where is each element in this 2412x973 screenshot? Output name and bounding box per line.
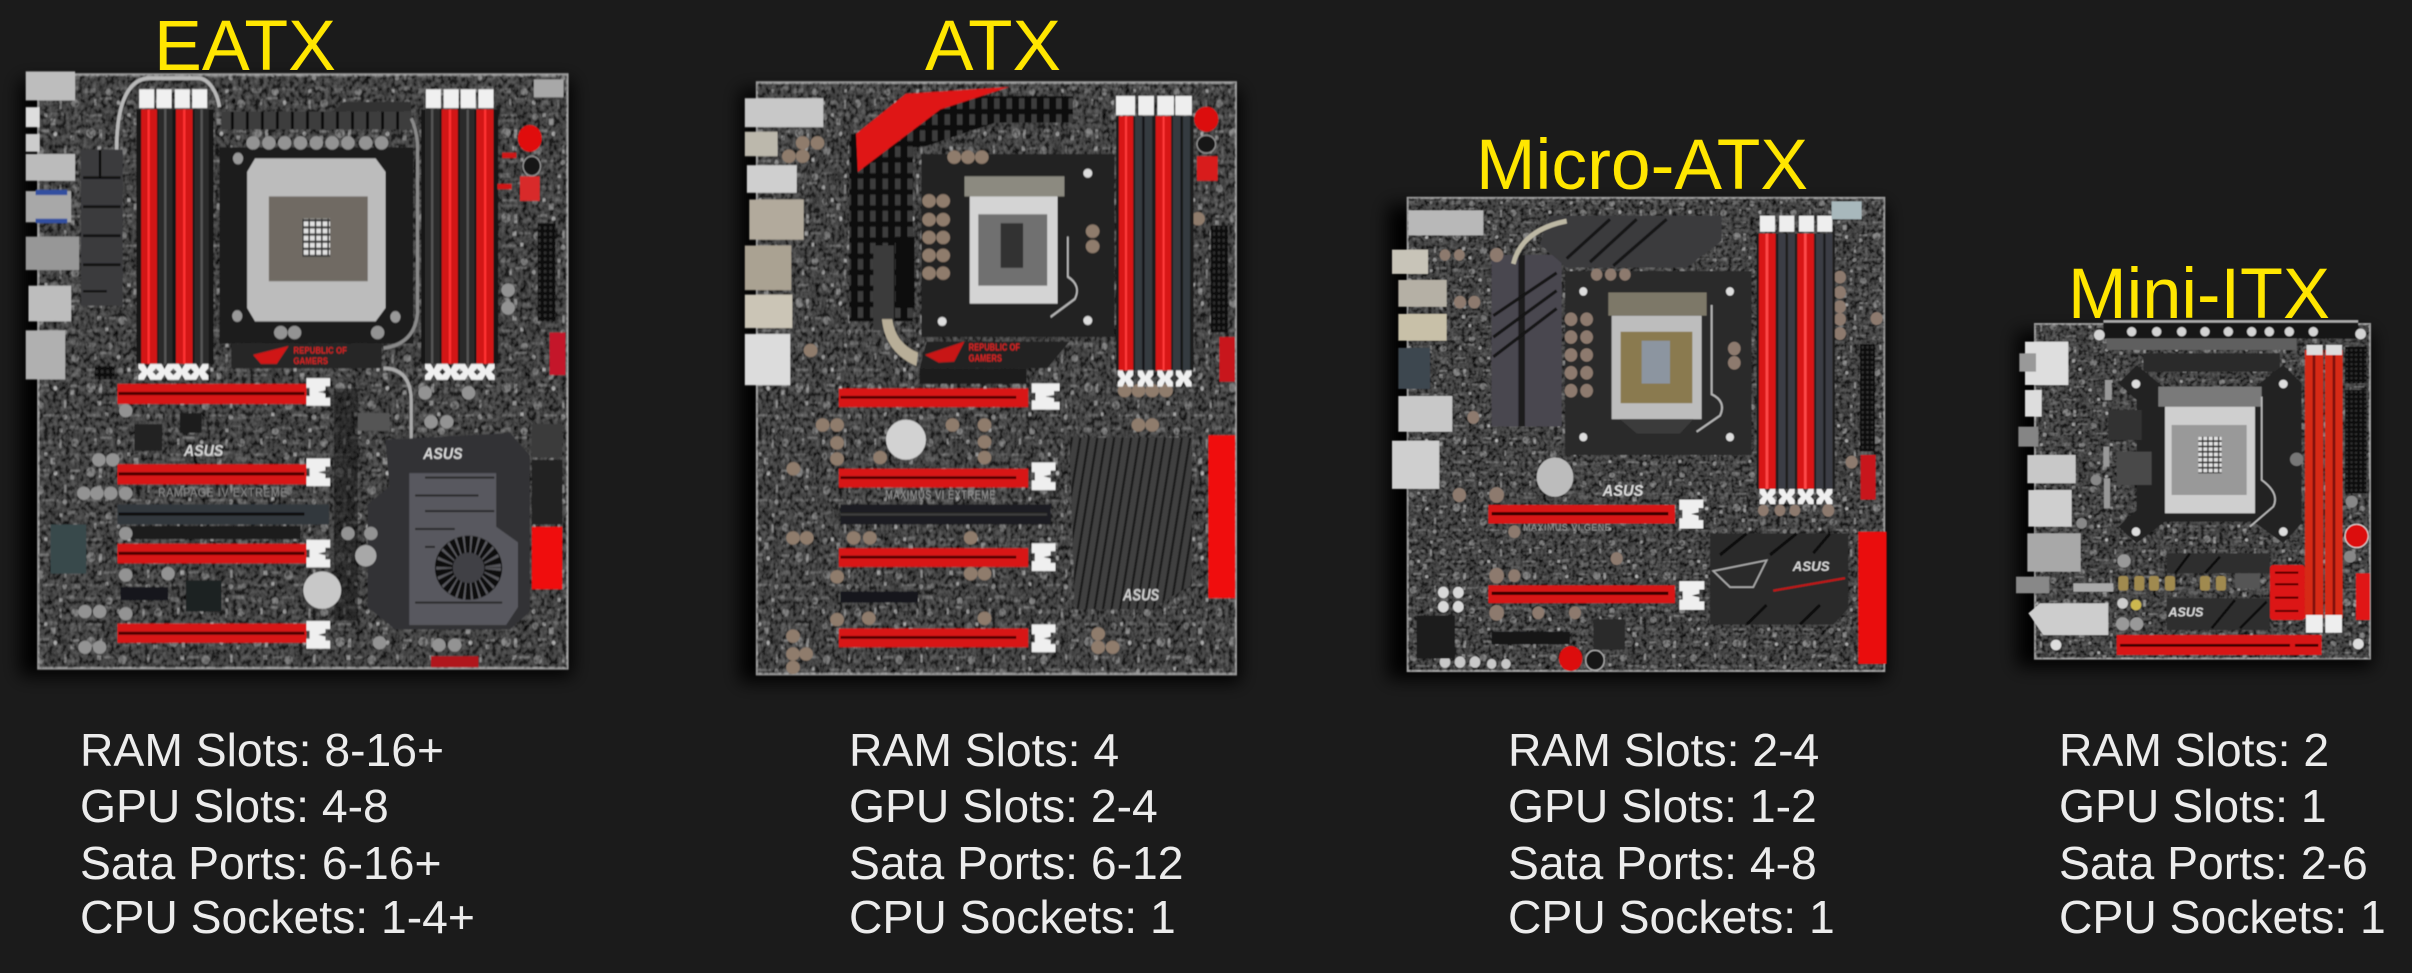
specs: Micro-ATX: RAM Slots: 2-4 (1508, 724, 1819, 776)
board name: MAXIMUS VI EXTREME (885, 490, 996, 502)
title: EATX: EATX (154, 7, 336, 86)
ROG plate: REPUBLIC OF (293, 345, 347, 356)
ROG chipset heatsink: ASUS (1792, 558, 1830, 574)
board logos: ASUS (183, 442, 223, 460)
capacitors (2076, 453, 2358, 631)
board logos (158, 442, 288, 500)
ROG plate (231, 344, 382, 368)
VRM heatsink (81, 150, 123, 306)
specs: Micro-ATX: Sata Ports: 4-8 (1508, 837, 1817, 889)
ROG chipset heatsink (1710, 534, 1848, 625)
specs: Mini-ITX (2059, 724, 2386, 943)
chipset heatsink (2167, 553, 2270, 630)
specs: ATX: CPU Sockets: 1 (849, 891, 1176, 943)
SATA ports (2270, 565, 2305, 620)
VRM heatsinks (1492, 216, 1722, 426)
specs: ATX: RAM Slots: 4 (849, 724, 1119, 776)
motherboard: Mini-ITX (2016, 320, 2370, 659)
power connector (1211, 225, 1235, 382)
RAM slots (1757, 201, 1862, 504)
chipset fan heatsink: ASUS (422, 445, 463, 463)
shadow: ATX board (740, 90, 1240, 682)
top heatsink (221, 102, 411, 129)
power connector (538, 223, 556, 321)
specs: Mini-ITX: Sata Ports: 2-6 (2059, 837, 2368, 889)
specs: Mini-ITX: GPU Slots: 1 (2059, 780, 2327, 832)
title: ATX: ATX (925, 7, 1061, 86)
capacitors and battery (1438, 248, 1883, 669)
onboard button (2344, 524, 2370, 620)
specs: EATX: RAM Slots: 8-16+ (80, 724, 444, 776)
title: Mini-ITX: Mini-ITX (2068, 255, 2330, 334)
CPU socket (1565, 271, 1752, 455)
ROG plate (920, 341, 1070, 384)
motherboard: ATX (745, 83, 1236, 674)
heat pipe (117, 78, 219, 150)
CPU socket (2118, 365, 2302, 543)
PCIe slot (2051, 635, 2364, 655)
chips (51, 366, 389, 620)
SATA ports (1208, 435, 1235, 598)
rear I/O ports (1392, 210, 1483, 489)
top heatsink (2094, 320, 2366, 372)
specs: Micro-ATX (1508, 724, 1835, 943)
ROG plate: GAMERS (293, 355, 328, 366)
SATA ports (431, 333, 565, 667)
shadow: Mini-ITX board (2017, 332, 2372, 667)
specs: ATX: Sata Ports: 6-12 (849, 837, 1184, 889)
motherboard: EATX (26, 71, 567, 668)
specs: ATX: GPU Slots: 2-4 (849, 780, 1158, 832)
onboard buttons (1559, 619, 1625, 671)
SATA ports (1858, 532, 1887, 664)
specs: EATX: Sata Ports: 6-16+ (80, 837, 442, 889)
specs: Micro-ATX: GPU Slots: 1-2 (1508, 780, 1817, 832)
ROG plate: REPUBLIC OF (969, 341, 1021, 353)
RAM slots (1116, 96, 1194, 387)
PCIe slots (1417, 500, 1704, 659)
onboard buttons (497, 79, 563, 201)
specs: Mini-ITX: CPU Sockets: 1 (2059, 891, 2386, 943)
RAM slots right (421, 89, 498, 380)
CPU socket (921, 154, 1114, 337)
board logos: ASUS (1602, 483, 1643, 500)
chipset heatsink: ASUS (2167, 606, 2204, 620)
heatsink with red wedge (849, 87, 1073, 366)
rear I/O ports (2016, 342, 2113, 635)
chipset fan heatsink (368, 433, 530, 629)
onboard buttons (1194, 107, 1218, 181)
RAM slots (2305, 345, 2343, 633)
chips (2103, 380, 2152, 508)
RAM slots left (136, 89, 214, 380)
board logos: MAXIMUS VI GENE (1523, 522, 1611, 533)
specs: ATX (849, 724, 1184, 943)
specs: EATX: CPU Sockets: 1-4+ (80, 891, 475, 943)
specs: Micro-ATX: CPU Sockets: 1 (1508, 891, 1835, 943)
power connector (1860, 344, 1876, 500)
PCIe slots (117, 378, 330, 649)
board logos (1523, 483, 1643, 533)
specs: EATX (80, 724, 475, 943)
rear I/O ports (745, 98, 823, 385)
capacitors and battery (782, 136, 1205, 674)
specs: Mini-ITX: RAM Slots: 2 (2059, 724, 2329, 776)
ROG plate: GAMERS (969, 353, 1002, 364)
power connectors (2345, 347, 2367, 493)
chipset heatsink (1070, 437, 1192, 609)
CPU socket (219, 118, 418, 440)
title: Micro-ATX: Micro-ATX (1476, 126, 1808, 205)
shadow: EATX board (20, 80, 572, 676)
PCIe slots (839, 383, 1060, 652)
motherboard: Micro-ATX (1392, 198, 1887, 671)
board logos: RAMPAGE IV EXTREME (158, 487, 288, 500)
shadow: Micro-ATX board (1388, 205, 1886, 679)
rear I/O ports (26, 71, 79, 379)
chipset heatsink: ASUS (1122, 586, 1159, 605)
capacitors and battery (77, 136, 515, 654)
specs: EATX: GPU Slots: 4-8 (80, 780, 389, 832)
